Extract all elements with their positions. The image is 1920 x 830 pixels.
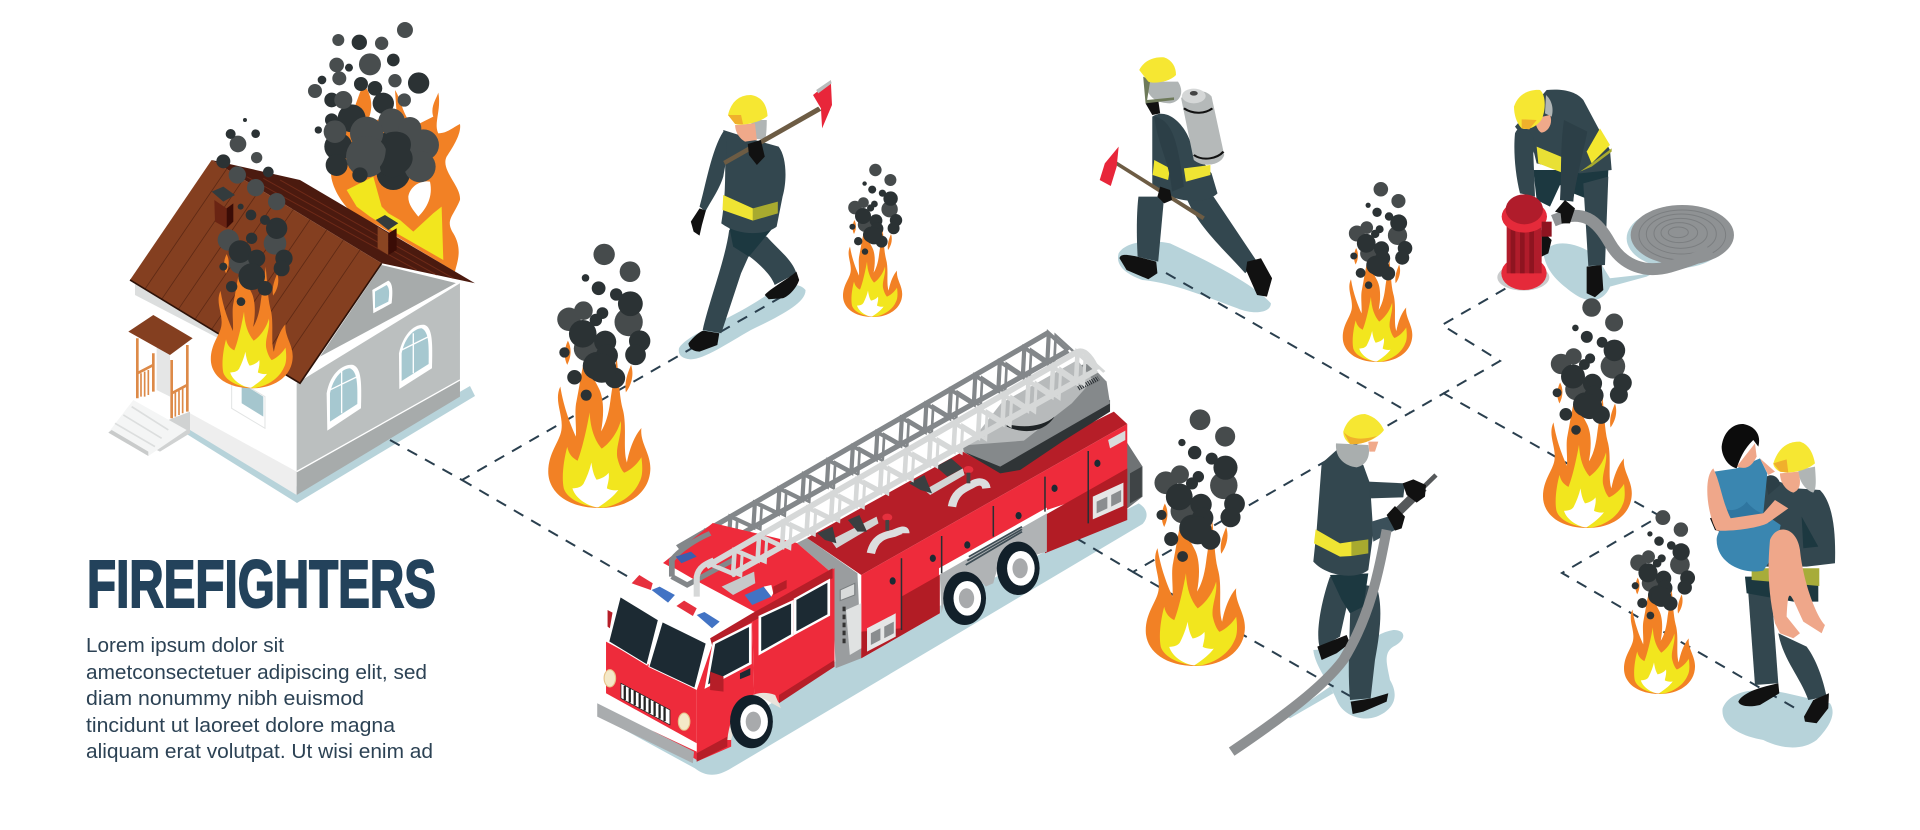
- window left wall: [232, 377, 265, 428]
- cab roof: [663, 523, 832, 613]
- ground shadows: [185, 241, 1833, 775]
- body deck: [807, 412, 1127, 575]
- deck equipment: [817, 458, 986, 553]
- fire B: [843, 164, 902, 317]
- firefighter with axe on shoulder: [688, 80, 832, 352]
- body side: [861, 424, 1127, 658]
- fire E: [1543, 298, 1632, 528]
- fire truck: [597, 332, 1143, 763]
- description text: [86, 634, 433, 763]
- title: FIREFIGHTERS: [87, 547, 436, 622]
- description text: tincidunt ut laoreet dolore magna: [86, 714, 396, 737]
- firefighter with hose: [1232, 414, 1436, 752]
- fire behind the roof: [308, 22, 460, 272]
- front light ladder: [697, 351, 1104, 597]
- porch: [152, 323, 187, 413]
- woman: [1707, 424, 1825, 638]
- firefighter at hydrant: [1514, 90, 1734, 297]
- fire F: [1624, 510, 1695, 694]
- burning house: [108, 22, 475, 495]
- roof light bars: [632, 575, 787, 628]
- attic window: [372, 281, 392, 313]
- house structure: [108, 118, 475, 495]
- hose coil: [1627, 205, 1734, 268]
- description text: Lorem ipsum dolor sit: [86, 634, 284, 657]
- windows right wall: [327, 365, 361, 431]
- fire D: [1146, 409, 1245, 666]
- chimneys: [214, 200, 227, 228]
- side vents: [867, 431, 1125, 652]
- description text: aliquam erat volutpat. Ut wisi enim ad: [86, 740, 433, 763]
- firefighter with air tank and axe: [1100, 57, 1272, 297]
- rear and gap: [1125, 440, 1143, 510]
- rear dark ladder: [678, 332, 1075, 557]
- roof fire and smoke: [211, 254, 293, 388]
- cab: [748, 568, 834, 703]
- turret: [963, 400, 1110, 473]
- dashed connector lines: [390, 273, 1800, 711]
- description text: ametconsectetuer adipiscing elit, sed: [86, 661, 427, 684]
- front grille, lights and bumper: [597, 670, 697, 763]
- fire hydrant: [1497, 194, 1552, 291]
- side pump panel: [840, 583, 861, 655]
- roof: [212, 160, 475, 283]
- fire C: [1343, 182, 1412, 362]
- firefighter carrying woman: [1707, 424, 1835, 723]
- wheels: [727, 542, 1040, 748]
- description text: diam nonummy nibh euismod: [86, 687, 364, 710]
- fire A: [548, 244, 650, 508]
